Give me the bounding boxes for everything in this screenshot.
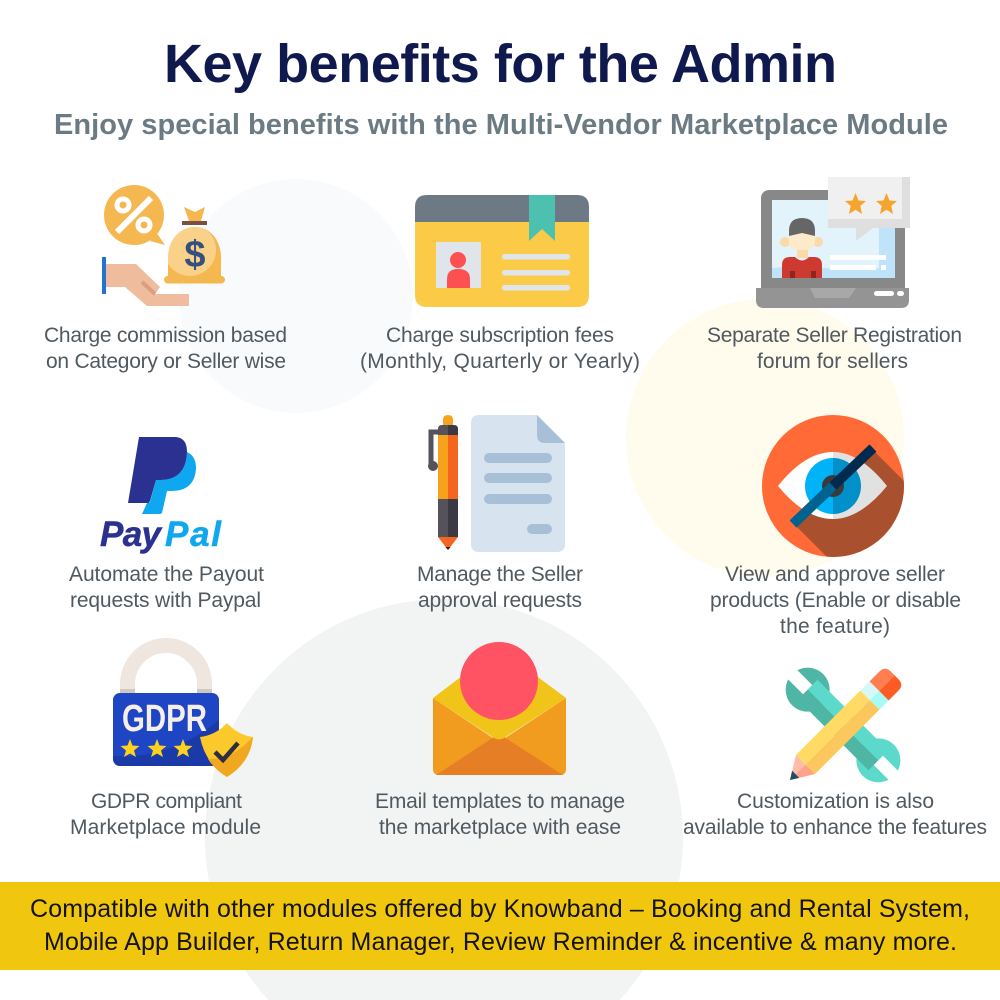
icon: PayPal logo: Pay [100,515,163,554]
caption: seller registration: Separate Seller Registration [707,324,962,347]
title: Key benefits for the Admin [164,34,837,94]
caption: paypal payouts [69,563,264,612]
panel: seller approval [417,415,583,612]
caption: commission: on Category or Seller wise [46,350,286,373]
caption: seller approval: approval requests [418,589,582,612]
subtitle: Enjoy special benefits with the Multi-Vendor Marketplace Module [54,109,948,141]
caption: approve products: products (Enable or disable [710,589,961,612]
panel: subscription fees [360,195,640,373]
caption: customization [683,790,987,839]
caption: commission: Charge commission based [44,324,287,347]
caption: customization: available to enhance the features [683,816,987,839]
icon: crossed-out eye [762,415,904,557]
caption: commission [44,324,287,373]
panel: seller registration [707,177,962,373]
caption: approve products: the feature) [780,615,890,638]
icon: pen and document [428,415,565,552]
icon: open envelope with red circle [433,642,566,775]
banner: compatibility note [0,882,1000,970]
caption: email templates: Email templates to manage [375,790,625,813]
caption: seller approval [417,563,583,612]
icon: laptop with seller and rating bubble [756,177,910,308]
panel: GDPR [70,646,261,839]
caption: approve products: View and approve seller [725,563,945,586]
icon: GDPR padlock with shield: GDPR [122,698,207,740]
caption: approve products [710,563,961,638]
icon: PayPal logo: Pal [165,515,222,554]
panel: paypal payouts [69,437,264,612]
panel: email templates [375,642,625,839]
banner: compatibility note: Mobile App Builder, Return Manager, Review Reminder & incentive & many more. [44,928,957,956]
panel: approve products [710,415,961,638]
caption: email templates: the marketplace with ease [379,816,621,839]
caption: GDPR: GDPR compliant [91,790,242,813]
caption: subscription fees [360,324,640,373]
icon: PayPal logo [100,437,222,554]
caption: GDPR: Marketplace module [70,816,261,839]
banner: compatibility note: Compatible with other modules offered by Knowband – Booking and Rental System, [30,895,970,923]
caption: subscription fees: (Monthly, Quarterly or Yearly) [360,350,640,373]
caption: seller registration: forum for sellers [757,350,908,373]
panel: commission [44,185,287,373]
icon: GDPR padlock with shield [113,646,253,777]
caption: seller approval: Manage the Seller [417,563,583,586]
icon: commission money bag and hand: $ [184,234,206,276]
panel: customization [683,656,987,839]
caption: customization: Customization is also [737,790,934,813]
icon: commission money bag and hand [102,185,225,306]
caption: paypal payouts: Automate the Payout [69,563,264,586]
caption: email templates [375,790,625,839]
icon: ID card [415,195,589,307]
icon: crossed wrench and pencil [774,656,912,794]
caption: seller registration [707,324,962,373]
caption: paypal payouts: requests with Paypal [70,589,261,612]
caption: subscription fees: Charge subscription fees [386,324,614,347]
caption: GDPR [70,790,261,839]
